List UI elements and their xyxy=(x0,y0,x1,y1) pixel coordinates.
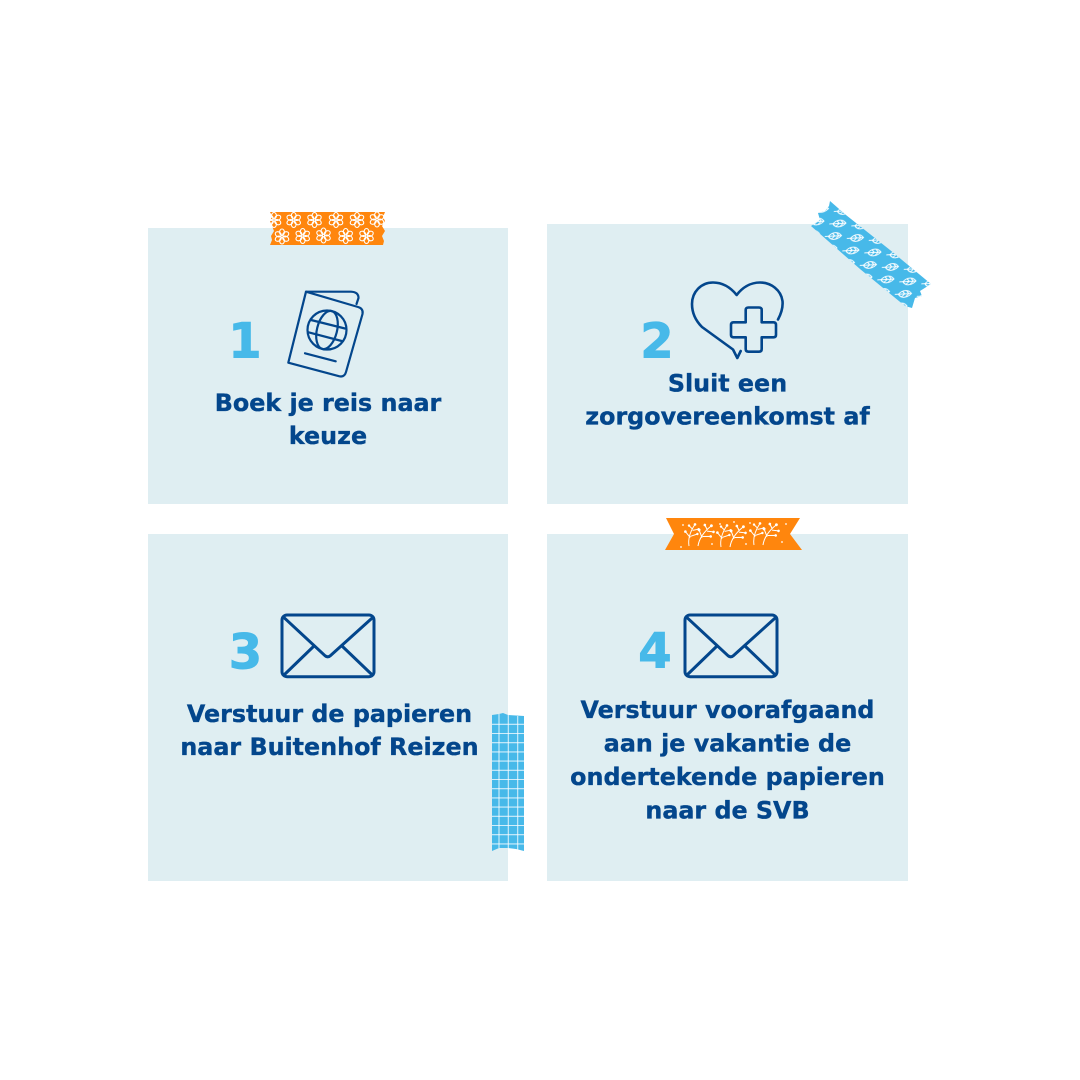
step 1 text xyxy=(215,389,442,450)
step 1 text: Boek je reis naar xyxy=(215,389,442,417)
tape: blue leaves xyxy=(811,201,931,308)
icon: passport xyxy=(288,292,363,376)
panel: step 3 background xyxy=(148,534,508,881)
step 4 text: ondertekende papieren xyxy=(570,763,885,791)
step 2 text: zorgovereenkomst af xyxy=(585,402,870,430)
panel: step 4 background xyxy=(547,534,908,881)
icon: heart with cross xyxy=(692,282,783,358)
panel: step 2 background xyxy=(547,224,908,504)
panel: step 1 background xyxy=(148,228,508,504)
step 1 number: 1 xyxy=(228,314,262,370)
tape: orange ribbon with sprigs xyxy=(665,518,802,551)
step 4 number: 4 xyxy=(638,624,672,680)
step 3 text: naar Buitenhof Reizen xyxy=(180,733,479,761)
step 2 text: Sluit een xyxy=(668,370,787,398)
step 2 number: 2 xyxy=(640,314,674,370)
step 4 text: naar de SVB xyxy=(645,796,810,824)
icon: envelope xyxy=(685,615,777,677)
tape: blue grid xyxy=(492,713,524,851)
step 3 text: Verstuur de papieren xyxy=(187,700,472,728)
step 2 text xyxy=(585,370,870,430)
step 4 text: Verstuur voorafgaand xyxy=(581,696,874,724)
tape: orange flowers xyxy=(266,212,385,245)
step 1 text: keuze xyxy=(289,422,367,450)
step 4 text xyxy=(570,696,885,824)
step 3 number: 3 xyxy=(229,624,262,680)
step 3 text xyxy=(180,700,479,761)
step 4 text: aan je vakantie de xyxy=(604,730,851,758)
icon: envelope xyxy=(282,615,374,677)
